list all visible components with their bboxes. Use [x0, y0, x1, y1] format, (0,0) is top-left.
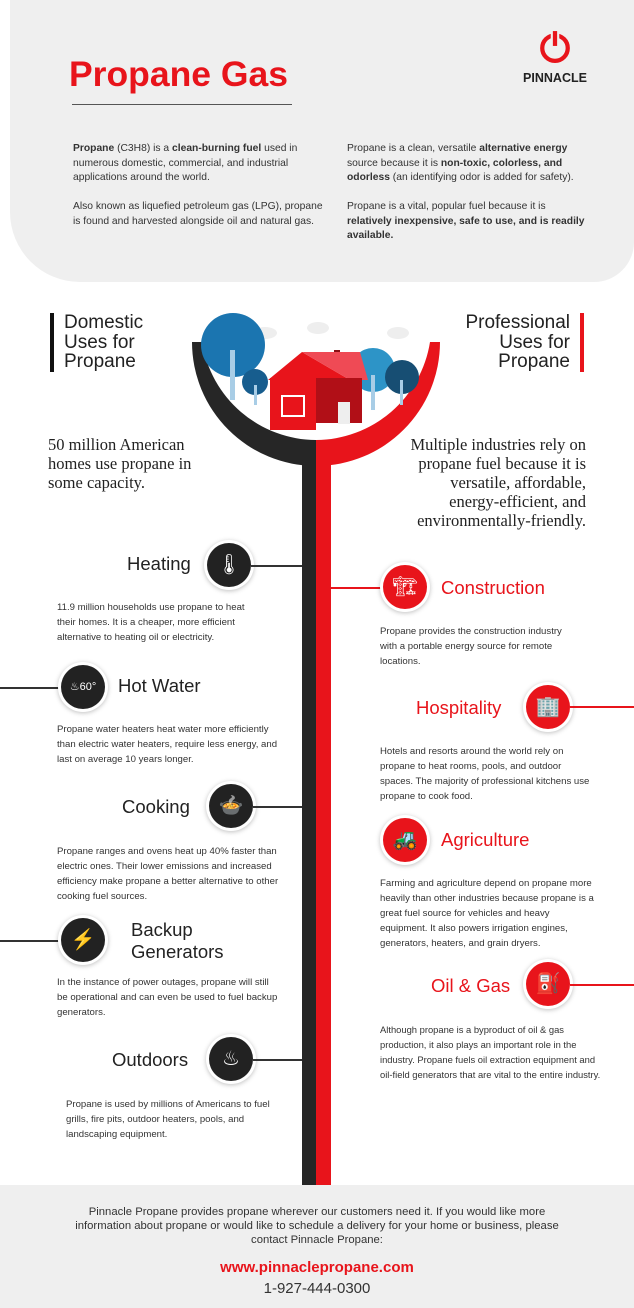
item: cooking: Propane ranges and ovens heat up 40% faster than electric ones. Their lower emissions and increased efficiency make propane a better alternative to other cooking fuel sources. — [57, 846, 278, 902]
intro text right: Propane is a clean, versatile alternative energy source because it is non-toxic, colorless, and odorless (an identifying odor is added for safety). — [347, 143, 574, 183]
heading: professional — [430, 313, 584, 372]
header panel — [10, 0, 634, 282]
heading: professional: Uses for — [499, 332, 570, 352]
item: heating: 11.9 million households use propane to heat their homes. It is a cheaper, more efficient alternative to heating oil or electricity. — [57, 602, 245, 643]
heading: domestic: Uses for — [64, 332, 135, 352]
item: heating: 🌡 — [216, 554, 242, 576]
item: hospitality — [380, 680, 634, 802]
heading: professional: Professional — [465, 312, 570, 333]
item: cooking — [57, 780, 302, 902]
item: hot water — [0, 660, 277, 765]
item: construction: Construction — [441, 577, 545, 598]
professional stat: energy-efficient, and — [449, 492, 586, 511]
item: hospitality: 🏢 — [536, 696, 560, 718]
heading: domestic: Propane — [64, 351, 136, 372]
professional stat — [410, 435, 586, 530]
item: heating: Heating — [127, 553, 191, 574]
item: backup generators — [0, 914, 277, 1018]
footer: www.pinnaclepropane.com — [220, 1259, 414, 1276]
item: construction: Propane provides the construction industry with a portable energy source for remote locations. — [380, 626, 562, 667]
item: agriculture: Farming and agriculture depend on propane more heavily than other industries because propane is a great fuel source for vehicles and heavy equipment. It also powers irrigation engines, generators, heaters, and grain dryers. — [380, 878, 594, 949]
footer: 1-927-444-0300 — [264, 1280, 370, 1297]
item: agriculture: 🚜 — [393, 829, 417, 851]
logo — [523, 31, 587, 85]
item: cooking: Cooking — [122, 796, 190, 817]
domestic stat — [48, 435, 192, 492]
item: oil and gas: Although propane is a byproduct of oil & gas production, it also plays an important role in the industry. Propane fuels oil extraction equipment and oil-field generators that are vital to the entire industry. — [380, 1024, 600, 1080]
professional stat: versatile, affordable, — [450, 473, 586, 492]
item: backup generators: In the instance of power outages, propane will still be operational and can even be used to fuel backup generators. — [57, 977, 277, 1018]
professional stat: environmentally-friendly. — [417, 511, 586, 530]
item: hospitality: Hospitality — [416, 697, 501, 718]
item: oil and gas: Oil & Gas — [431, 975, 510, 996]
item: oil and gas — [380, 958, 634, 1080]
intro text left: Also known as liquefied petroleum gas (LPG), propane is found and harvested alongside oil and natural gas. — [73, 201, 323, 226]
domestic stat: some capacity. — [48, 473, 145, 492]
item: construction: 🏗 — [392, 576, 418, 598]
item: hot water: Hot Water — [118, 675, 201, 696]
heading: domestic: Domestic — [64, 312, 143, 333]
domestic stat: homes use propane in — [48, 454, 191, 473]
logo: PINNACLE — [523, 71, 587, 85]
professional stat: Multiple industries rely on — [410, 435, 586, 454]
item: construction — [331, 560, 562, 667]
item: agriculture: Agriculture — [441, 829, 529, 850]
domestic stat: 50 million American — [48, 435, 185, 454]
title: Propane Gas — [69, 54, 288, 94]
item: backup generators: Backup — [131, 919, 193, 940]
item: outdoors: Propane is used by millions of Americans to fuel grills, fire pits, outdoor heaters, pools, and landscaping equipment. — [66, 1099, 270, 1140]
footer — [0, 1185, 634, 1308]
item: hospitality: Hotels and resorts around the world rely on propane to heat rooms, pools, and outdoor spaces. The majority of professional kitchens use propane to cook food. — [380, 746, 589, 802]
item: outdoors — [66, 1032, 302, 1140]
item: heating — [57, 538, 302, 643]
item: outdoors: Outdoors — [112, 1049, 188, 1070]
item: cooking: 🍲 — [219, 795, 243, 817]
item: backup generators: ⚡ — [71, 929, 95, 951]
item: hot water: Propane water heaters heat water more efficiently than electric water heaters, require less energy, and last on average 10 years longer. — [57, 724, 277, 765]
item: hot water: ♨60° — [70, 681, 96, 693]
item: backup generators: Generators — [131, 941, 224, 962]
professional stat: propane fuel because it is — [418, 454, 586, 473]
intro text left: Propane (C3H8) is a clean-burning fuel used in numerous domestic, commercial, and industrial applications around the world. — [73, 143, 297, 183]
heading: domestic — [50, 313, 143, 372]
item: oil and gas: ⛽ — [536, 973, 560, 995]
item: agriculture — [378, 814, 594, 949]
intro text right: Propane is a vital, popular fuel because it is relatively inexpensive, safe to use, and is readily available. — [347, 201, 585, 241]
item: outdoors: ♨ — [222, 1048, 240, 1070]
bowl and stem graphic — [192, 313, 440, 1185]
heading: professional: Propane — [498, 351, 570, 372]
intro text right — [347, 143, 585, 241]
intro text left — [73, 143, 323, 226]
footer: Pinnacle Propane provides propane wherever our customers need it. If you would like more information about propane or would like to schedule a delivery for your home or business, please contact Pinnacle Propane: — [75, 1206, 559, 1246]
